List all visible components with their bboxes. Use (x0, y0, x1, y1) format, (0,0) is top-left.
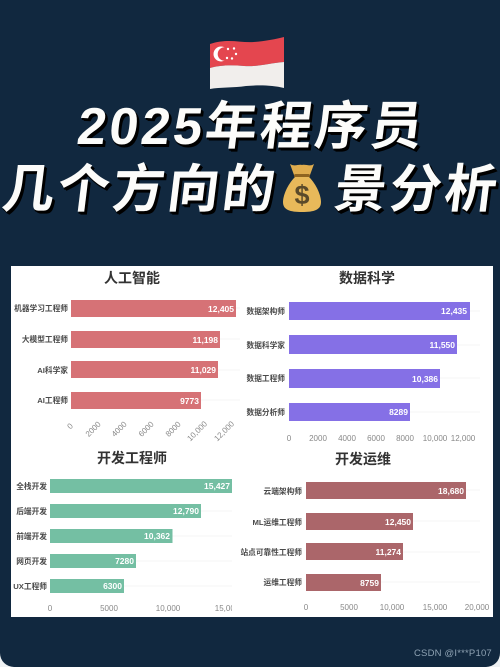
values: data science: 10,386 (412, 374, 438, 384)
values: devops: 11,274 (375, 547, 401, 557)
icon: Singapore flag (210, 37, 284, 89)
axis ticks: devops: 10,000 (380, 603, 405, 612)
heading: devops: 开发运维 (335, 451, 391, 467)
watermark: CSDN @I***P107 (414, 648, 492, 659)
axis ticks: AI: 12,000 (212, 419, 236, 443)
axis ticks: developer: 10,000 (156, 604, 181, 613)
categories: data science: 数据架构师 (247, 306, 285, 316)
axis ticks: AI: 2000 (84, 419, 103, 439)
values: developer: 10,362 (144, 531, 170, 541)
values: devops (360, 486, 464, 588)
values: developer: 7280 (115, 556, 134, 566)
axis ticks: AI (65, 419, 236, 443)
categories: developer: 网页开发 (16, 556, 47, 566)
bars: developer (50, 479, 232, 593)
categories: data science: 数据工程师 (247, 373, 285, 383)
axis ticks: data science: 0 (287, 434, 292, 443)
values: developer: 12,790 (173, 506, 199, 516)
icon: money bag (283, 164, 321, 212)
title line 2: 几个方向的 (0, 161, 281, 219)
bars: data science (289, 302, 470, 421)
values: data science: 11,550 (429, 340, 455, 350)
chart: developer (13, 450, 240, 613)
axis ticks: data science: 10,000 (423, 434, 448, 443)
axis ticks: data science: 4000 (338, 434, 356, 443)
values: data science: 8289 (389, 407, 408, 417)
categories: devops (240, 486, 302, 587)
values: data science: 12,435 (441, 306, 467, 316)
values: data science (389, 306, 467, 417)
values: devops: 8759 (360, 578, 379, 588)
axis ticks: developer: 5000 (100, 604, 118, 613)
values: developer: 15,427 (204, 481, 230, 491)
panel: charts (11, 266, 493, 617)
title line 1: 2025年程序员 (74, 98, 429, 156)
categories: developer: 全栈开发 (16, 481, 47, 491)
categories: data science (247, 306, 285, 417)
axis ticks: data science: 6000 (367, 434, 385, 443)
categories: data science: 数据科学家 (247, 340, 285, 350)
bars: AI (71, 300, 236, 409)
heading: data science: 数据科学 (339, 270, 395, 286)
values: devops: 18,680 (438, 486, 464, 496)
axis ticks: devops: 0 (304, 603, 309, 612)
axis ticks: AI: 0 (65, 421, 75, 431)
axis ticks: AI: 10,000 (185, 419, 209, 443)
axis ticks: data science: 12,000 (451, 434, 476, 443)
values: AI: 11,029 (190, 365, 216, 375)
values: devops: 12,450 (385, 517, 411, 527)
axis ticks: data science: 8000 (396, 434, 414, 443)
values: AI: 12,405 (208, 304, 234, 314)
categories: devops: ML运维工程师 (252, 517, 302, 527)
chart: devops (240, 451, 490, 612)
axis ticks: devops (304, 603, 490, 612)
categories: AI: AI科学家 (37, 365, 68, 375)
categories: devops: 站点可靠性工程师 (240, 547, 302, 557)
categories: developer (13, 481, 47, 591)
values: AI (180, 304, 234, 406)
axis ticks: AI: 6000 (137, 419, 156, 439)
axis ticks: AI: 4000 (110, 419, 129, 439)
values: AI: 9773 (180, 396, 199, 406)
chart: AI (14, 270, 240, 443)
heading: AI: 人工智能 (104, 270, 160, 286)
icon: money bag: $ (294, 180, 310, 210)
axis ticks: developer: 0 (48, 604, 53, 613)
categories: developer: 前端开发 (16, 531, 47, 541)
categories: AI (14, 303, 68, 405)
heading: developer: 开发工程师 (97, 450, 167, 466)
bars: devops (306, 482, 466, 591)
axis ticks: data science (287, 434, 476, 443)
axis ticks: developer (48, 604, 240, 613)
categories: AI: 机器学习工程师 (14, 303, 68, 313)
title line 2 continued: 景分析 (331, 161, 500, 219)
values: AI: 11,198 (192, 335, 218, 345)
categories: data science: 数据分析师 (247, 407, 285, 417)
axis ticks: devops: 5000 (340, 603, 358, 612)
categories: AI: AI工程师 (37, 395, 68, 405)
axis ticks: AI: 8000 (164, 419, 183, 439)
categories: developer: 后端开发 (16, 506, 47, 516)
categories: devops: 运维工程师 (264, 577, 302, 587)
axis ticks: devops: 15,000 (423, 603, 448, 612)
axis ticks: devops: 20,000 (465, 603, 490, 612)
axis ticks: data science: 2000 (309, 434, 327, 443)
categories: developer: UX工程师 (13, 581, 47, 591)
values: developer (103, 481, 230, 591)
chart: data science (247, 270, 480, 443)
categories: AI: 大模型工程师 (22, 334, 68, 344)
values: developer: 6300 (103, 581, 122, 591)
categories: devops: 云端架构师 (264, 486, 302, 496)
axis ticks: developer: 15,000 (215, 604, 240, 613)
